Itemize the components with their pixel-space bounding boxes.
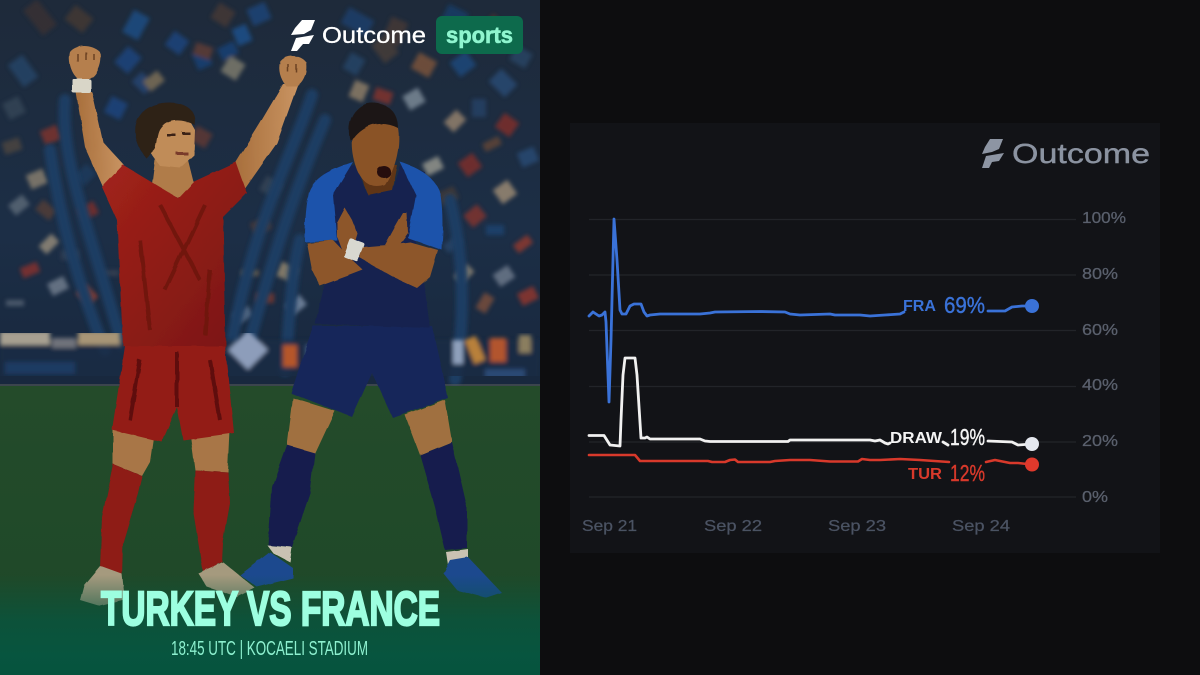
y axis labels: 20%	[1082, 433, 1118, 450]
y axis labels: 40%	[1082, 377, 1118, 394]
y axis labels: 60%	[1082, 322, 1118, 339]
turkey hair	[135, 103, 195, 158]
turkey shirt	[102, 162, 247, 346]
y axis labels: 0%	[1082, 489, 1108, 506]
label: Draw	[890, 424, 985, 450]
france crossed arms	[307, 208, 438, 288]
line: France	[589, 219, 1039, 402]
panel: match poster	[0, 0, 540, 675]
turkey wristband	[72, 79, 91, 93]
turkey shorts	[112, 346, 234, 442]
turkey fists	[69, 46, 306, 86]
player: France	[240, 103, 502, 598]
player: Turkey	[69, 46, 306, 606]
label: France: FRA	[903, 298, 936, 315]
x axis labels	[582, 518, 1010, 535]
france sleeves	[305, 162, 443, 250]
france socks	[268, 442, 467, 550]
painted halo around players	[50, 95, 462, 380]
sports badge	[436, 16, 523, 54]
x axis labels: Sep 21	[582, 518, 637, 535]
turkey head	[150, 120, 195, 168]
line: Turkey	[589, 455, 1039, 472]
label: France: 69%	[944, 292, 985, 318]
label: Draw: 19%	[950, 424, 985, 450]
france shirt torso	[315, 165, 430, 328]
line: Draw	[589, 358, 1039, 451]
label: Draw: DRAW	[890, 430, 942, 447]
turkey neck	[152, 160, 194, 198]
label: Turkey: TUR	[908, 466, 942, 483]
france hair	[349, 103, 398, 140]
france head	[352, 123, 399, 187]
turkey arms	[76, 84, 298, 193]
chart logo mark	[982, 139, 1004, 168]
grass pitch	[0, 386, 540, 636]
chart logo wordmark: Outcome	[1012, 138, 1150, 169]
x axis labels: Sep 22	[704, 518, 762, 535]
logo mark	[291, 20, 315, 51]
turkey end dot	[1025, 458, 1039, 472]
france knees	[287, 398, 452, 455]
x axis labels: Sep 24	[952, 518, 1010, 535]
y axis labels: 100%	[1082, 210, 1126, 227]
logo wordmark: Outcome	[322, 22, 426, 48]
lower crowd band	[0, 335, 540, 374]
france end dot	[1025, 299, 1039, 313]
x axis labels: Sep 23	[828, 518, 886, 535]
label: Turkey	[908, 460, 985, 486]
label: France	[903, 292, 985, 318]
chart logo	[982, 138, 1150, 169]
title: TURKEY VS FRANCE	[101, 583, 440, 636]
france shorts	[291, 326, 448, 418]
france neck	[357, 165, 397, 195]
top logo	[291, 20, 426, 51]
france wristband	[343, 238, 365, 262]
france boots	[240, 552, 502, 598]
match details: 18:45 UTC | KOCAELI STADIUM	[171, 638, 368, 660]
bottom green fade	[0, 575, 540, 675]
y axis labels: 80%	[1082, 266, 1118, 283]
label: Turkey: 12%	[950, 460, 985, 486]
sports badge: sports	[446, 22, 513, 48]
turkey boots	[80, 562, 255, 606]
draw end dot	[1025, 437, 1039, 451]
stadium crowd background	[0, 0, 540, 387]
panel: probability chart	[570, 123, 1160, 553]
y axis labels	[1082, 210, 1126, 506]
turkey legs	[100, 428, 230, 576]
france mouth	[377, 166, 391, 178]
